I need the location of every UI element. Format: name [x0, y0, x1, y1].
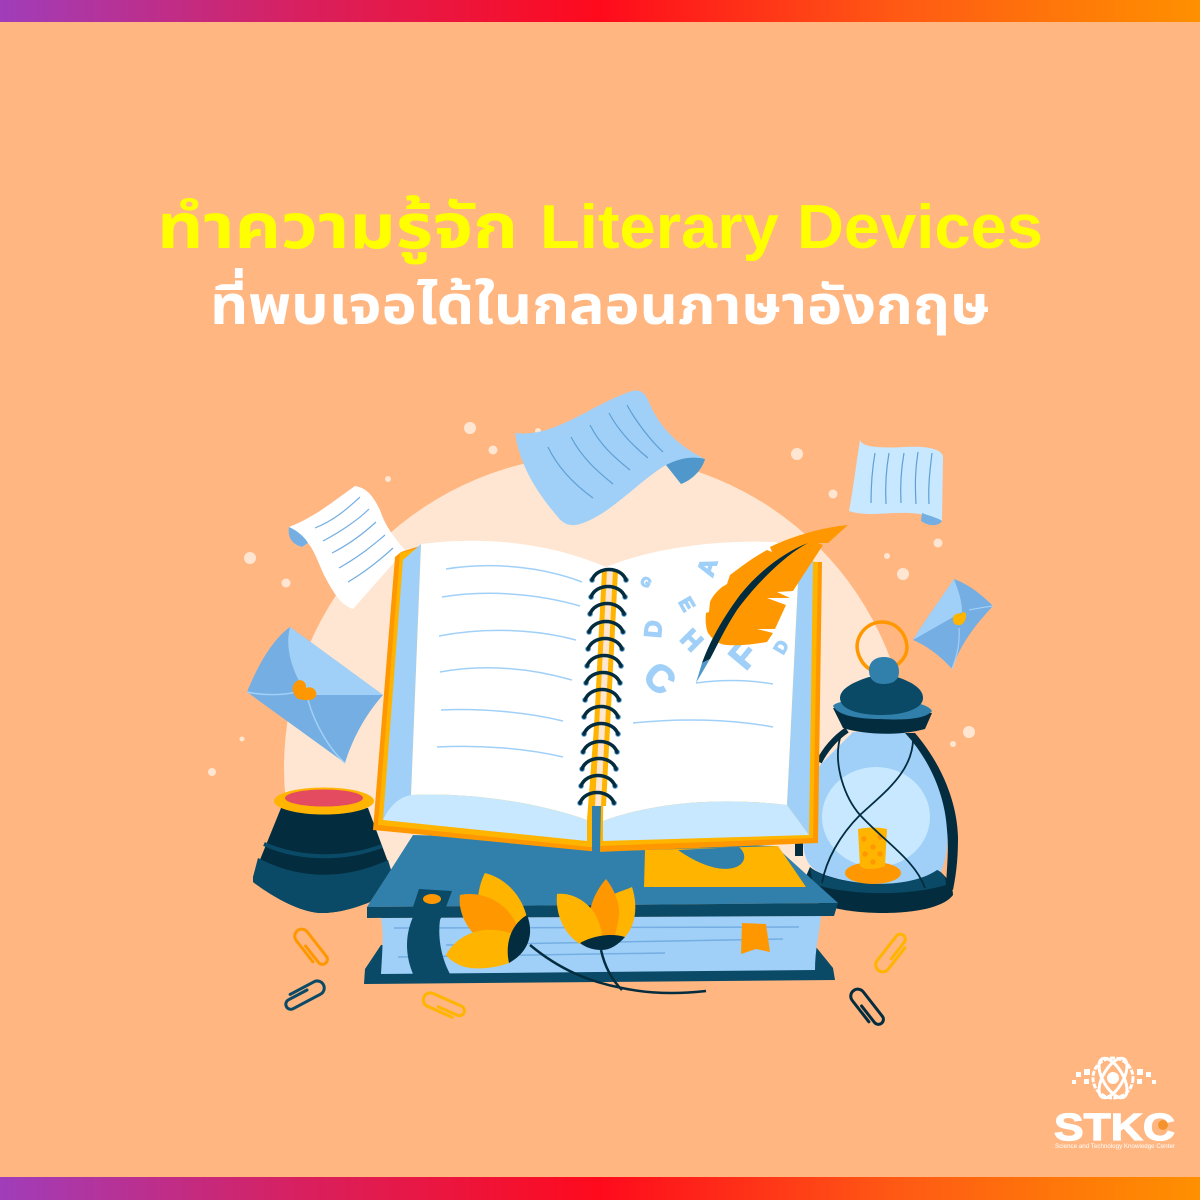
right page bottom	[603, 801, 809, 841]
left page	[411, 541, 606, 820]
icon: heart seal	[293, 680, 316, 700]
envelope: left	[247, 627, 383, 763]
floating letters: G	[638, 573, 654, 591]
lantern base	[800, 867, 953, 913]
clip: gold right	[873, 932, 910, 975]
book: bottom cover	[364, 945, 835, 984]
logo tagline: Science and Technology Knowledge Center	[1055, 1144, 1175, 1150]
icon: heart seal	[953, 612, 966, 625]
left cover	[373, 546, 600, 852]
clip: gold bottom	[421, 991, 466, 1021]
book: top cover	[367, 835, 838, 907]
open book	[373, 541, 822, 853]
envelope: right	[913, 579, 993, 669]
clip: orange	[292, 926, 329, 969]
background arch	[284, 464, 908, 875]
right page side	[787, 560, 813, 835]
logo side squares	[1072, 1069, 1156, 1084]
stacked book	[364, 835, 838, 984]
floating letters: H	[675, 623, 709, 657]
candle	[845, 862, 901, 884]
clip: dark left	[282, 978, 327, 1011]
floating letters: D	[640, 619, 668, 639]
flying sheet: right light	[849, 440, 943, 525]
lantern cap	[833, 708, 932, 734]
spiral binding	[580, 570, 626, 803]
floating letters: E	[674, 594, 698, 615]
right page	[603, 542, 813, 821]
ink pot	[253, 788, 391, 913]
lantern	[795, 622, 958, 913]
ink pot rim	[274, 788, 374, 814]
lantern glass	[803, 732, 948, 888]
floating letters: A	[692, 555, 723, 580]
floating letters: F	[720, 633, 766, 677]
spine strip	[590, 570, 618, 806]
lantern wires	[838, 738, 925, 888]
top gradient bar	[0, 0, 1200, 22]
floating letters: D	[770, 637, 793, 657]
flower: right	[557, 879, 635, 950]
floating letters	[635, 555, 793, 704]
logo wordmark: STKC	[1054, 1107, 1175, 1149]
heading line 1: Thai part: ทำความรู้จัก	[157, 193, 518, 265]
book: pages	[381, 916, 821, 974]
spine	[592, 803, 601, 853]
quill	[696, 525, 848, 683]
page lines	[437, 566, 773, 757]
right cover	[597, 552, 822, 852]
book: strap	[407, 889, 452, 974]
book: bookmark	[741, 923, 770, 954]
floating letters: C	[635, 654, 683, 704]
paper clips	[282, 926, 910, 1029]
book: yellow card	[644, 846, 806, 887]
flower: left	[446, 873, 530, 968]
left page bottom	[383, 795, 587, 841]
heading line 1: English part: Literary Devices	[540, 193, 1043, 262]
left page side	[383, 544, 421, 820]
heading line 2: ที่พบเจอได้ในกลอนภาษาอังกฤษ	[210, 268, 990, 336]
lantern ring	[857, 622, 907, 671]
logo atom icon	[1093, 1054, 1133, 1102]
flying sheet: top blue	[515, 390, 705, 525]
clip: dark right	[848, 986, 885, 1029]
decorative dots	[208, 422, 975, 776]
bottom gradient bar	[0, 1177, 1200, 1200]
lantern frame	[905, 733, 958, 890]
flower stems	[530, 945, 706, 993]
flying sheet: white left	[289, 486, 405, 609]
STKC logo	[1054, 1054, 1175, 1150]
title	[157, 193, 1043, 336]
